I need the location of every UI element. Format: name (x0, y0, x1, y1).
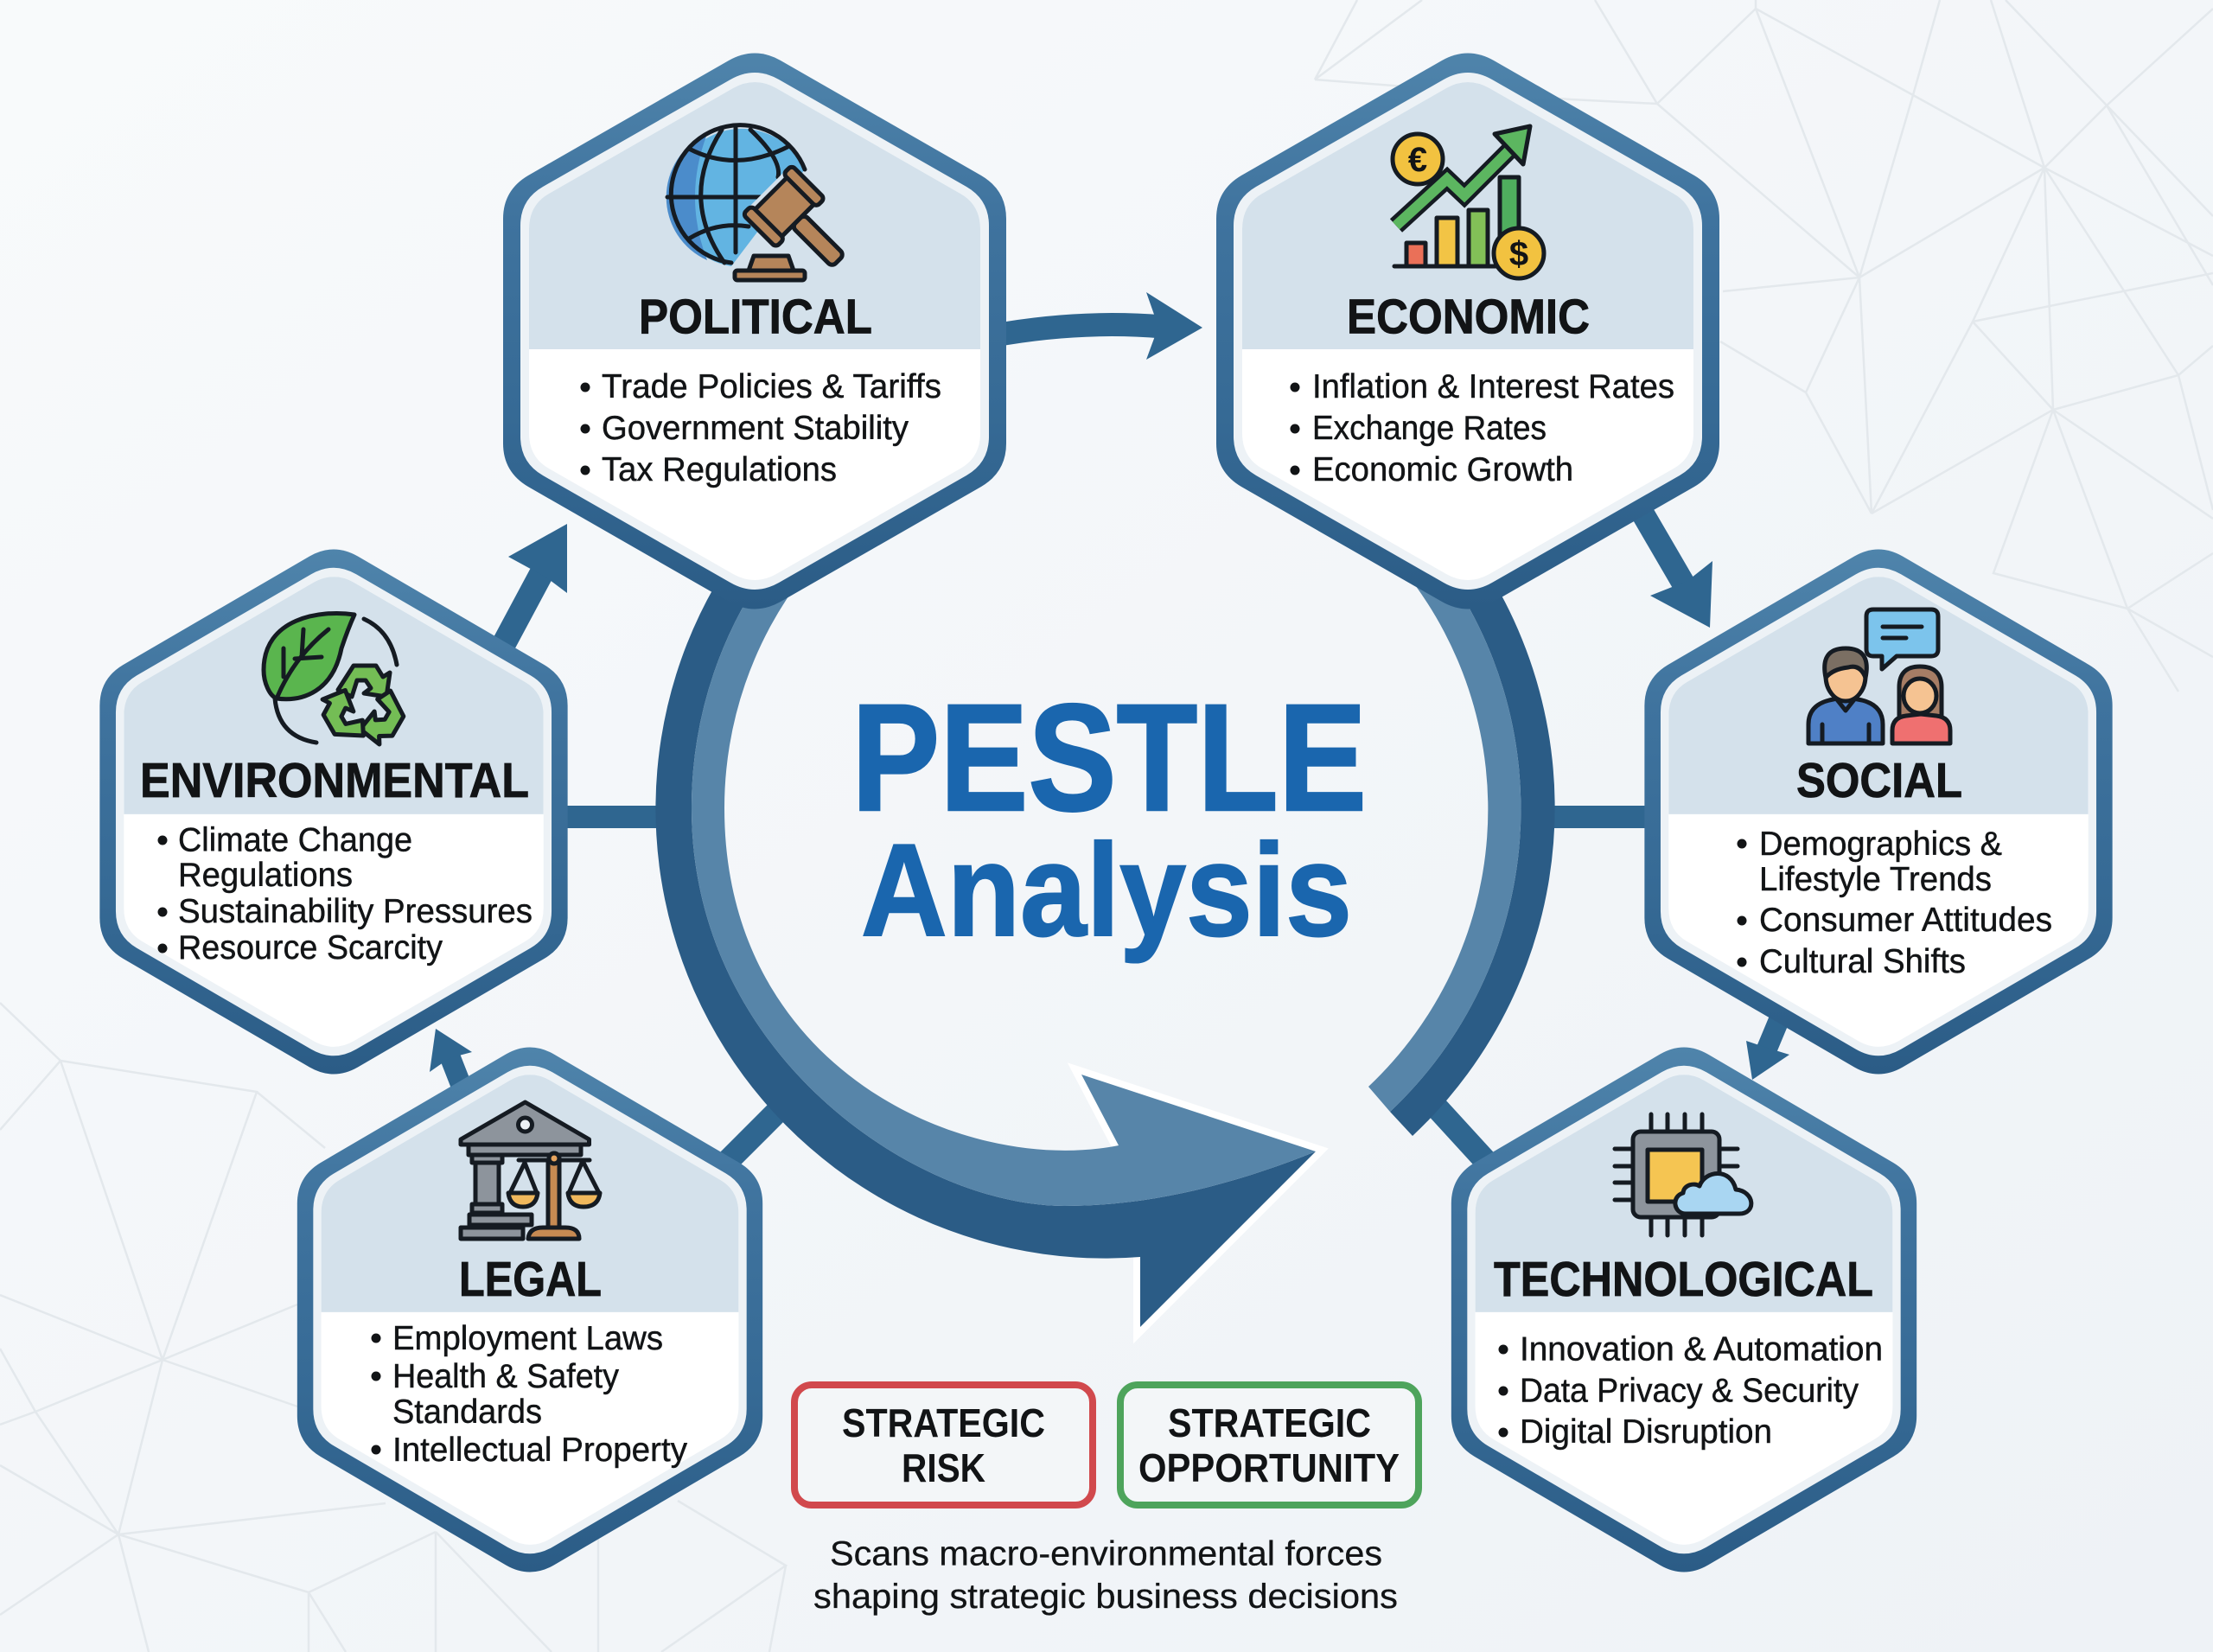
panel: environmental (99, 550, 568, 1074)
heading: LEGAL (459, 1252, 602, 1307)
bullet list: Exchange Rates (1312, 410, 1547, 447)
bullet list: Standards (392, 1394, 542, 1431)
arrow: political to economic (994, 292, 1202, 360)
bullet list: Digital Disruption (1520, 1413, 1772, 1451)
arrow: economic to social (1638, 506, 1712, 628)
icon: growth chart and coins: $ (1509, 235, 1528, 273)
bullet list: Cultural Shifts (1759, 943, 1966, 980)
bullet list: Regulations (178, 857, 353, 894)
bullet list: Innovation & Automation (1520, 1331, 1883, 1368)
heading: ECONOMIC (1347, 289, 1590, 344)
callout: strategic risk: RISK (902, 1445, 985, 1490)
icon: chip and cloud (1615, 1114, 1751, 1235)
bullet list (157, 821, 533, 966)
bullet list: Data Privacy & Security (1520, 1373, 1859, 1409)
title: Analysis (861, 817, 1352, 964)
title: PESTLE (851, 673, 1367, 843)
central cycle ring (655, 532, 1555, 1327)
bullet list: Employment Laws (392, 1320, 663, 1357)
panel: economic (1216, 54, 1719, 609)
callout: strategic opportunity (1120, 1385, 1419, 1505)
bullet list: Economic Growth (1312, 451, 1573, 488)
icon: courthouse and scales (461, 1102, 600, 1239)
bullet list (372, 1320, 687, 1469)
icon: two people talking (1808, 609, 1950, 743)
caption: shaping strategic business decisions (813, 1578, 1398, 1616)
heading: POLITICAL (639, 289, 872, 344)
right arc (1368, 532, 1555, 1136)
bullet list: Government Stability (602, 410, 909, 447)
icon: globe and gavel (666, 125, 863, 285)
bullet list: Inflation & Interest Rates (1312, 368, 1674, 405)
bullet list: Demographics & (1759, 826, 2002, 863)
panel: political (503, 54, 1006, 609)
bullet list: Health & Safety (392, 1358, 619, 1395)
arrow: social to technological (1746, 1011, 1789, 1080)
title (851, 673, 1367, 964)
panel: technological (1451, 1048, 1916, 1572)
connector: social to ring (1543, 806, 1651, 828)
bullet list: Trade Policies & Tariffs (602, 368, 941, 405)
heading: TECHNOLOGICAL (1494, 1252, 1873, 1307)
callout: strategic risk: STRATEGIC (842, 1400, 1045, 1445)
bullet list (1290, 368, 1674, 488)
connector: environmental to ring (562, 806, 670, 828)
callout: strategic opportunity: OPPORTUNITY (1138, 1445, 1400, 1490)
bullet list (581, 368, 941, 488)
bullet list: Climate Change (178, 821, 412, 859)
connector: technological to ring (1426, 1096, 1491, 1167)
callout: strategic opportunity: STRATEGIC (1168, 1400, 1371, 1445)
bullet list (1499, 1331, 1883, 1451)
bullet list: Lifestyle Trends (1759, 861, 1992, 898)
icon: growth chart and coins (1393, 126, 1544, 278)
arrow: environmental to political (501, 524, 567, 648)
caption: Scans macro-environmental forces (830, 1535, 1382, 1573)
connector: legal to ring (726, 1107, 782, 1163)
heading: ENVIRONMENTAL (140, 753, 529, 808)
panel: social (1644, 550, 2113, 1074)
heading: SOCIAL (1796, 753, 1962, 808)
left arc with arrowhead (655, 532, 1316, 1327)
panel: legal (297, 1048, 762, 1572)
bullet list: Resource Scarcity (178, 929, 443, 966)
arrow: legal to environmental (430, 1029, 472, 1091)
callout: strategic risk (794, 1385, 1093, 1505)
icon: leaf and recycling (264, 613, 411, 748)
bullet list: Consumer Attitudes (1759, 902, 2052, 939)
bullet list: Intellectual Property (392, 1432, 687, 1469)
bullet list: Sustainability Pressures (178, 893, 533, 930)
caption (813, 1535, 1398, 1616)
icon: growth chart and coins: € (1408, 141, 1427, 179)
bullet list: Tax Regulations (602, 451, 837, 488)
bullet list (1738, 826, 2052, 980)
